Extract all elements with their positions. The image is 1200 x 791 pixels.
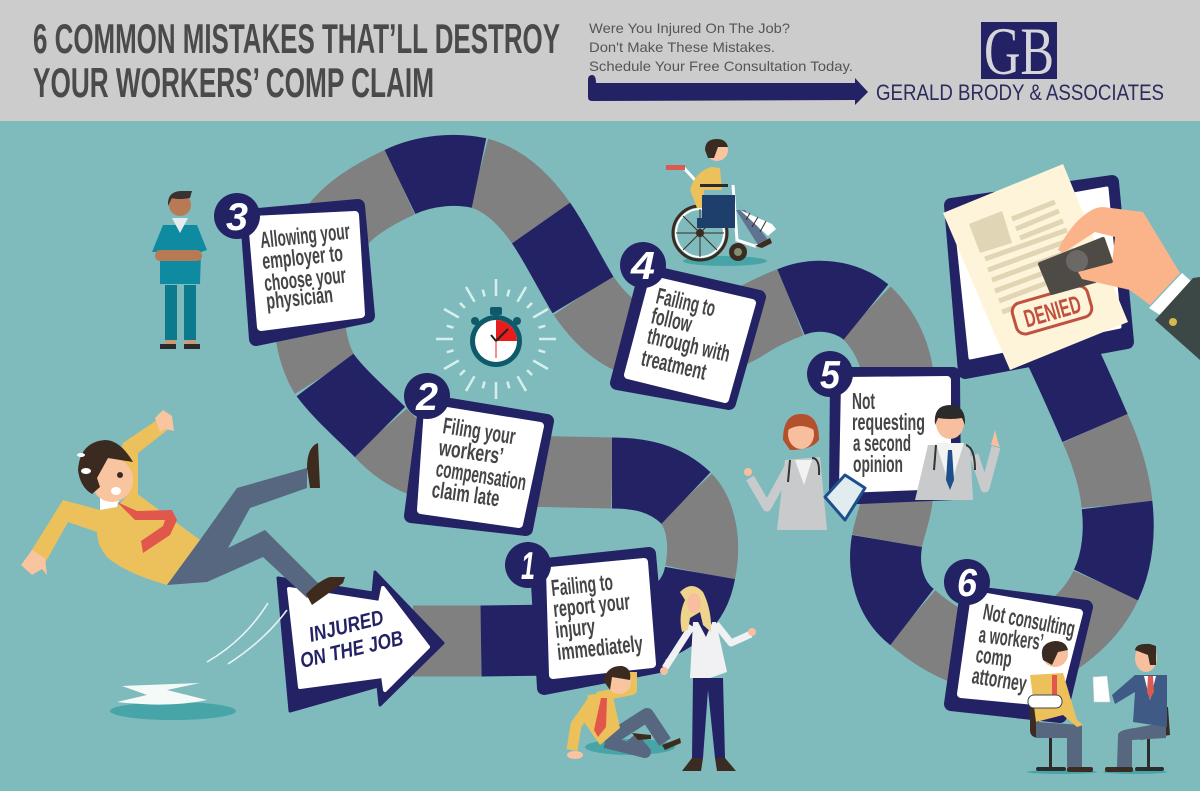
call to action text: Were You Injured On The Job? bbox=[589, 20, 790, 36]
card 1: injury bbox=[554, 613, 596, 643]
card 6 bbox=[944, 559, 1086, 716]
slip motion lines bbox=[207, 603, 287, 664]
denied stamp mark bbox=[1010, 284, 1094, 336]
card 3 bbox=[214, 193, 368, 339]
logo: GB bbox=[984, 13, 1054, 89]
call to action text: Don't Make These Mistakes. bbox=[589, 39, 775, 55]
figure: injured client seated bbox=[1027, 641, 1097, 774]
title bbox=[33, 15, 560, 106]
denied stamp mark: DENIED bbox=[1021, 290, 1084, 333]
card 5: a second bbox=[853, 430, 911, 456]
card 4: 4 bbox=[630, 245, 655, 288]
start arrow: injured on the job: INJURED bbox=[307, 606, 386, 647]
logo bbox=[876, 13, 1164, 105]
card 4: through with bbox=[645, 323, 733, 367]
card 6: attorney bbox=[970, 662, 1029, 697]
figure: woman in white suit bbox=[660, 586, 756, 771]
stamp bbox=[1040, 239, 1111, 293]
cuff bbox=[1149, 273, 1192, 315]
title: YOUR WORKERS’ COMP CLAIM bbox=[33, 59, 434, 106]
card 2 bbox=[404, 373, 547, 529]
figure: falling worker bbox=[21, 410, 345, 605]
card 3: employer to bbox=[261, 240, 344, 274]
card 4 bbox=[617, 242, 759, 403]
card 2: Filing your bbox=[441, 412, 517, 449]
card 1: report your bbox=[552, 588, 631, 622]
card 1: Failing to bbox=[550, 569, 614, 601]
figure: male doctor bbox=[915, 405, 1000, 500]
card 3: physician bbox=[265, 281, 334, 314]
radiating lines bbox=[436, 279, 556, 399]
card 1: 1 bbox=[521, 545, 535, 588]
card 6: a workers’ bbox=[977, 621, 1045, 655]
card 2: workers’ bbox=[437, 434, 505, 469]
card 5: opinion bbox=[853, 451, 903, 477]
figure: attorney seated bbox=[1093, 644, 1170, 774]
hand palm bbox=[1078, 240, 1180, 305]
card 4: treatment bbox=[639, 345, 709, 385]
figure: female doctor bbox=[744, 414, 865, 530]
card 5: requesting bbox=[852, 409, 925, 435]
card 2: compensation bbox=[434, 455, 528, 495]
card 5 bbox=[807, 351, 954, 498]
header band bbox=[0, 0, 1200, 121]
card 2: claim late bbox=[430, 476, 501, 511]
start arrow: injured on the job: ON THE JOB bbox=[298, 627, 405, 673]
card 3: choose your bbox=[263, 262, 347, 296]
figure: man in wheelchair bbox=[666, 139, 776, 266]
title: 6 COMMON MISTAKES THAT’LL DESTROY bbox=[33, 15, 560, 62]
call to action text: Schedule Your Free Consultation Today. bbox=[589, 58, 853, 74]
denied document on clipboard bbox=[943, 164, 1200, 372]
road path bbox=[309, 170, 1118, 658]
start arrow: injured on the job bbox=[278, 572, 443, 711]
card 1 bbox=[505, 542, 659, 688]
call to action text bbox=[589, 20, 853, 74]
header arrow bbox=[588, 75, 868, 105]
card 1: immediately bbox=[556, 630, 644, 665]
card 6: Not consulting bbox=[981, 598, 1077, 642]
stopwatch bbox=[436, 279, 556, 399]
sleeve bbox=[1155, 277, 1200, 360]
hand fingers bbox=[1058, 207, 1180, 305]
card 6: 6 bbox=[957, 562, 977, 605]
figure: surgeon bbox=[152, 191, 207, 349]
card 4: Failing to bbox=[654, 283, 718, 321]
card 4: follow bbox=[649, 303, 695, 337]
card 3: Allowing your bbox=[259, 218, 351, 253]
card 5: Not bbox=[852, 388, 875, 414]
card 2: 2 bbox=[415, 376, 438, 419]
figure: seated injured worker bbox=[567, 666, 681, 759]
puddle bbox=[110, 683, 236, 720]
card 6: comp bbox=[974, 641, 1014, 672]
card 5: 5 bbox=[820, 354, 841, 397]
card 3: 3 bbox=[226, 196, 248, 239]
